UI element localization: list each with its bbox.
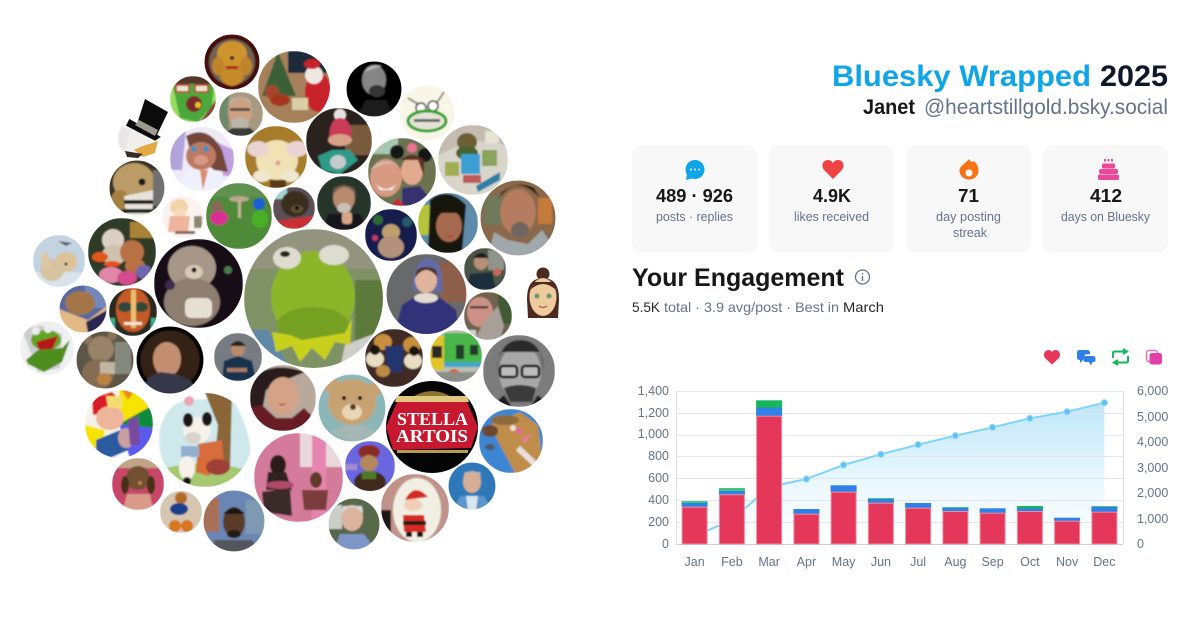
left axis labels: 1,400 (638, 384, 669, 398)
icon: heart (822, 160, 844, 179)
right axis labels: 5,000 (1137, 410, 1168, 424)
avatar: fozzie bear cartoon (479, 409, 544, 473)
stat label: day posting (936, 210, 1001, 224)
month labels: Nov (1056, 555, 1079, 569)
right axis labels: 1,000 (1137, 512, 1168, 526)
icon: flame (960, 159, 978, 180)
month labels: Dec (1093, 555, 1116, 569)
avatar: smiling woman with black hair (418, 193, 478, 253)
avatar: mickey bears (365, 329, 423, 387)
left axis labels (638, 384, 669, 551)
avatar: frog christmas logo (399, 85, 455, 141)
avatar: man in blue suit (448, 462, 496, 510)
axis baseline (676, 544, 1123, 546)
avatar: older man smiling (328, 498, 380, 550)
left axis labels: 1,200 (638, 406, 669, 420)
stat value: 412 (1090, 185, 1122, 206)
avatar: teddy bear on blue (318, 374, 386, 442)
left axis labels: 400 (648, 493, 669, 507)
avatar: miss piggy rosie rainbow (85, 390, 153, 458)
avatar: bear in red knit hat (306, 108, 372, 174)
icon: chat bubble (686, 160, 704, 180)
engagement summary: 5.5K (632, 299, 661, 315)
avatar: stella artois logo: STELLA (397, 409, 468, 429)
avatar: kermit the frog plush (244, 229, 384, 369)
avatar: bear with striped scarf (109, 160, 165, 216)
avatar: woman with guitar in pink room (254, 433, 343, 522)
avatar: woman in blue knit hat (386, 254, 467, 335)
avatar: man in navy shirt (214, 333, 262, 381)
left axis labels: 0 (662, 537, 669, 551)
avatar: man with goatee (480, 180, 556, 256)
month labels: Jun (871, 555, 891, 569)
avatar: books and bear display (438, 125, 508, 195)
icon: birthday cake (1098, 159, 1119, 180)
avatar: scrooge mcduck in top hat (118, 99, 168, 158)
icon: quotes (1146, 350, 1162, 364)
icon: replies (1077, 350, 1096, 366)
user name and handle: Janet (863, 96, 915, 119)
avatar: grey teddy with cup (154, 239, 243, 328)
cumulative area (695, 403, 1104, 544)
month labels: Aug (944, 555, 967, 569)
avatar: stella artois logo: ARTOIS (396, 426, 468, 446)
right axis labels: 3,000 (1137, 461, 1168, 475)
avatar: bitmoji woman with bun (527, 268, 559, 318)
panel: days on bluesky (1043, 145, 1168, 253)
avatar: man with cat (464, 292, 512, 340)
avatar: green and yellow train (430, 330, 482, 382)
stat label: days on Bluesky (1061, 210, 1151, 224)
avatar: teddy bears and flowers (88, 218, 156, 286)
panel: likes received (769, 145, 894, 253)
avatar: bear with orange fried food (160, 491, 202, 533)
avatar: grey-haired man (219, 92, 263, 136)
icon: reposts (1113, 349, 1128, 365)
avatar: miss piggy in white coat (170, 127, 234, 191)
engagement summary (632, 299, 884, 315)
right axis labels: 2,000 (1137, 486, 1168, 500)
avatar: christmas tree and santa (258, 51, 331, 123)
avatar: man with city background (203, 490, 265, 552)
stat value: 489 · 926 (656, 185, 733, 206)
avatar: man with black glasses (483, 335, 555, 407)
left axis labels: 200 (648, 515, 669, 529)
month labels (685, 555, 1116, 569)
left axis labels: 600 (648, 471, 669, 485)
avatar: santa figurine (381, 474, 449, 542)
left axis labels: 1,000 (638, 427, 669, 441)
stacked bars (682, 400, 1117, 544)
right axis labels: 6,000 (1137, 384, 1168, 398)
month labels: May (832, 555, 856, 569)
avatar: bear with helmet (345, 441, 395, 493)
panel: day posting streak (906, 145, 1031, 253)
avatar: stella artois logo (386, 381, 478, 473)
cumulative line (695, 403, 1104, 536)
avatar: black and white man looking up (346, 61, 402, 117)
chart: monthly engagement (638, 384, 1168, 569)
avatar: cow reading under tree (158, 390, 252, 487)
avatar: pastel illustrated girl (162, 196, 204, 238)
title: 2025 (1100, 60, 1168, 93)
month labels: Sep (981, 555, 1004, 569)
icon: likes (1044, 350, 1060, 364)
avatar: man in brown portrait (136, 326, 204, 394)
line markers (803, 400, 1108, 482)
stat value: 71 (958, 185, 979, 206)
avatar: painted face with sunglasses (109, 288, 157, 336)
month labels: Apr (797, 555, 816, 569)
avatar: polar bear (33, 235, 85, 287)
avatar: orange teddy bear (204, 34, 260, 90)
right axis labels: 4,000 (1137, 435, 1168, 449)
avatar: man and girl with mouse ears (368, 138, 436, 206)
avatar: brown plush puppy (112, 458, 164, 510)
stat label: likes received (794, 210, 869, 224)
avatar: bear with book (59, 285, 107, 333)
avatar: teddy under lights (365, 209, 417, 261)
stat value: 4.9K (813, 185, 852, 206)
avatar: old worn teddy (76, 331, 134, 389)
month labels: Feb (721, 555, 743, 569)
avatar: small man dark tee (464, 248, 506, 290)
avatar: man with beard in black (317, 176, 371, 230)
heading: your engagement: Your Engagement (632, 264, 845, 292)
engagement summary: total · 3.9 avg/post · Best in (664, 299, 839, 315)
month labels: Jul (910, 555, 926, 569)
month labels: Oct (1020, 555, 1040, 569)
stat label (936, 210, 1001, 240)
avatar: woman with dark hair selfie (250, 365, 316, 431)
right axis labels: 0 (1137, 537, 1144, 551)
right axis labels (1137, 384, 1168, 551)
avatar: dark bear in red shirt (273, 187, 315, 229)
stat label: posts · replies (656, 210, 733, 224)
stat label: streak (953, 226, 988, 240)
icon: info (856, 270, 870, 284)
user name and handle: @heartstillgold.bsky.social (924, 96, 1168, 119)
avatar: green cartoon woman (170, 76, 216, 122)
avatar cluster (20, 34, 559, 552)
avatar: plush bunny (245, 126, 308, 188)
grid lines (676, 391, 1124, 544)
engagement summary: March (843, 299, 884, 315)
avatar: kermit cartoon sticker (20, 321, 74, 375)
panel: posts and replies (632, 145, 757, 253)
chart legend icons (1044, 349, 1162, 366)
avatar: plush toys on grass (206, 183, 272, 249)
month labels: Mar (758, 555, 780, 569)
title: Bluesky Wrapped (832, 60, 1091, 93)
month labels: Jan (685, 555, 705, 569)
left axis labels: 800 (648, 449, 669, 463)
